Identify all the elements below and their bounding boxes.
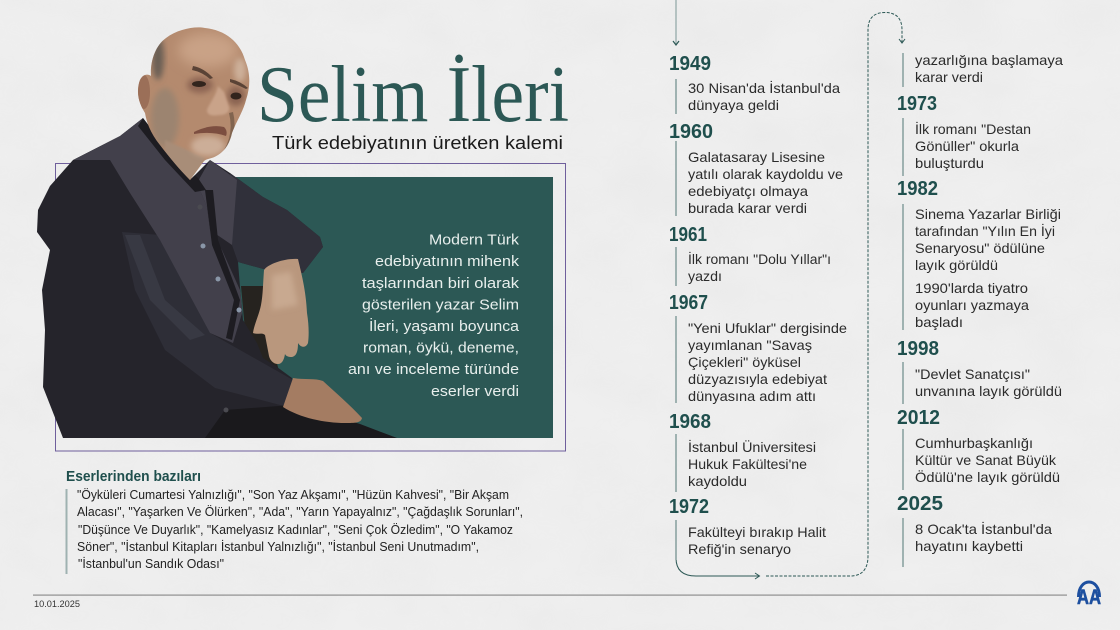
works list: "İstanbul'un Sandık Odası" bbox=[78, 556, 224, 571]
timeline 1968: kaydoldu bbox=[688, 473, 747, 489]
head bbox=[138, 27, 250, 180]
mouth bbox=[194, 126, 227, 136]
timeline 1982: layık görüldü bbox=[915, 257, 998, 273]
arrow: timeline start bbox=[673, 0, 679, 45]
timeline 1968: Hukuk Fakültesi'ne bbox=[688, 456, 807, 472]
timeline 1967: yayımlanan "Savaş bbox=[688, 337, 812, 353]
timeline 1998: "Devlet Sanatçısı" bbox=[915, 366, 1030, 382]
timeline 1960: 1960 bbox=[669, 121, 713, 143]
timeline 1967: Çiçekleri" öyküsel bbox=[688, 354, 801, 370]
panel intro text: İleri, yaşamı boyunca bbox=[369, 317, 520, 335]
timeline 2025 bbox=[897, 493, 1052, 567]
timeline 1968: 1968 bbox=[669, 411, 711, 433]
timeline 1949: dünyaya geldi bbox=[688, 97, 779, 113]
nose bbox=[207, 86, 229, 115]
panel frame bbox=[56, 164, 566, 451]
panel intro text: eserler verdi bbox=[431, 383, 519, 400]
brows bbox=[192, 66, 213, 79]
timeline 2012: 2012 bbox=[897, 407, 940, 429]
teal text panel bbox=[236, 177, 553, 438]
vest right bbox=[197, 160, 237, 245]
icon: AA logo bbox=[1077, 582, 1101, 609]
icon: AA logo: AA bbox=[1077, 586, 1101, 609]
raised hand bbox=[253, 259, 309, 364]
timeline 1982: 1990'larda tiyatro bbox=[915, 280, 1028, 296]
stubble shade bbox=[151, 88, 179, 148]
panel intro text: Modern Türk bbox=[429, 232, 520, 248]
left sleeve bbox=[122, 232, 293, 406]
timeline 1967: "Yeni Ufuklar" dergisinde bbox=[688, 320, 847, 336]
title: Selim İleri bbox=[257, 51, 569, 139]
timeline 1973: İlk romanı "Destan bbox=[915, 120, 1031, 137]
timeline 1949: 30 Nisan'da İstanbul'da bbox=[688, 79, 840, 96]
timeline 1968: İstanbul Üniversitesi bbox=[688, 438, 816, 455]
timeline 1973: buluşturdu bbox=[915, 155, 984, 171]
timeline 1982: oyunları yazmaya bbox=[915, 297, 1029, 313]
timeline 1998: unvanına layık görüldü bbox=[915, 383, 1062, 399]
timeline 2025: 8 Ocak'ta İstanbul'da bbox=[915, 520, 1052, 537]
timeline 1960: burada karar verdi bbox=[688, 200, 807, 216]
timeline 1961: İlk romanı "Dolu Yıllar"ı bbox=[688, 250, 831, 267]
works list bbox=[77, 487, 523, 571]
timeline 1972: 1972 bbox=[669, 496, 709, 518]
timeline 2025: hayatını kaybetti bbox=[915, 538, 1023, 554]
sleeve highlight bbox=[125, 235, 205, 340]
panel intro text: taşlarından biri olarak bbox=[362, 275, 520, 292]
works list: Söner", "İstanbul Kitapları İstanbul Yalnızlığı", "İstanbul Seni Unutmadım", bbox=[77, 539, 479, 554]
timeline 1961: 1961 bbox=[669, 224, 707, 246]
works list: "Düşünce Ve Duyarlık", "Kamelyasız Kadınlar", "Seni Çok Özledim", "O Yakamoz bbox=[78, 522, 513, 537]
timeline 1967 bbox=[669, 292, 847, 404]
timeline 1973: 1973 bbox=[897, 93, 937, 115]
works heading: Eserlerinden bazıları bbox=[66, 469, 201, 485]
timeline 1949 bbox=[669, 53, 840, 114]
timeline 1982: başladı bbox=[915, 314, 963, 330]
timeline 1972 continued: yazarlığına başlamaya bbox=[915, 52, 1063, 68]
hair side bbox=[152, 36, 164, 80]
timeline 1973: Gönüller" okurla bbox=[915, 138, 1019, 154]
timeline 1961: yazdı bbox=[688, 268, 722, 284]
button placket bbox=[205, 190, 240, 340]
timeline 1949: 1949 bbox=[669, 53, 711, 75]
portrait of Selim İleri bbox=[30, 20, 410, 440]
neck bbox=[164, 142, 203, 180]
timeline 1972 continued bbox=[902, 52, 1063, 87]
hand highlight bbox=[272, 272, 298, 310]
subtitle: Türk edebiyatının üretken kalemi bbox=[272, 133, 563, 153]
arrow: dashed connector to next column bbox=[766, 12, 905, 576]
chin and cheek light bbox=[191, 136, 225, 156]
timeline 1960: Galatasaray Lisesine bbox=[688, 149, 825, 165]
works section bbox=[66, 469, 523, 574]
button details bbox=[198, 204, 242, 412]
timeline 1967: dünyasına adım attı bbox=[688, 388, 816, 404]
timeline 1982: Sinema Yazarlar Birliği bbox=[915, 206, 1061, 222]
forehead light bbox=[178, 33, 238, 67]
panel intro text bbox=[348, 232, 520, 400]
cheek fold bbox=[224, 112, 235, 150]
timeline 2012: Ödülü'ne layık görüldü bbox=[915, 468, 1060, 485]
timeline 1972 bbox=[669, 496, 826, 560]
timeline 1982: 1982 bbox=[897, 178, 938, 200]
timeline 2012: Cumhurbaşkanlığı bbox=[915, 435, 1033, 451]
arrow: solid curve to next column bbox=[676, 558, 760, 579]
trousers bbox=[205, 405, 397, 438]
right sleeve bbox=[230, 173, 323, 273]
jacket and shading bbox=[30, 110, 410, 440]
eye sockets bbox=[187, 77, 213, 93]
date: 10.01.2025 bbox=[34, 599, 80, 610]
timeline 1972: Fakülteyi bırakıp Halit bbox=[688, 524, 826, 540]
timeline 1960 bbox=[669, 121, 843, 216]
panel intro text: roman, öykü, deneme, bbox=[363, 340, 519, 356]
ear bbox=[138, 75, 150, 109]
vest left bbox=[73, 118, 243, 343]
panel intro text: anı ve inceleme türünde bbox=[348, 361, 519, 378]
eyes bbox=[192, 81, 206, 87]
timeline 2025: 2025 bbox=[897, 493, 943, 515]
timeline 2012: Kültür ve Sanat Büyük bbox=[915, 452, 1057, 468]
works list: "Öyküleri Cumartesi Yalnızlığı", "Son Yaz Akşamı", "Hüzün Kahvesi", "Bir Akşam bbox=[77, 487, 509, 502]
timeline 1967: düzyazısıyla edebiyat bbox=[688, 371, 827, 387]
resting hand bbox=[283, 378, 362, 423]
chair back bbox=[241, 286, 282, 382]
timeline 1973 bbox=[897, 93, 1031, 176]
panel intro text: gösterilen yazar Selim bbox=[362, 296, 519, 314]
timeline 1968 bbox=[669, 411, 816, 492]
timeline 1998: 1998 bbox=[897, 338, 939, 360]
timeline 1982: tarafından "Yılın En İyi bbox=[915, 222, 1055, 239]
timeline 1961 bbox=[669, 224, 831, 286]
timeline 1998 bbox=[897, 338, 1062, 404]
collar bbox=[138, 118, 206, 192]
footer rule bbox=[33, 594, 1067, 596]
timeline 1972: Refiğ'in senaryo bbox=[688, 541, 791, 557]
works bar bbox=[66, 489, 68, 574]
timeline 1967: 1967 bbox=[669, 292, 708, 314]
timeline 1972 continued: karar verdi bbox=[915, 69, 983, 85]
panel intro text: edebiyatının mihenk bbox=[375, 253, 520, 270]
timeline 1960: yatılı olarak kaydoldu ve bbox=[688, 166, 843, 182]
timeline 1982 bbox=[897, 178, 1061, 330]
timeline 1982: Senaryosu" ödülüne bbox=[915, 240, 1045, 256]
timeline 1960: edebiyatçı olmaya bbox=[688, 183, 808, 199]
timeline 2012 bbox=[897, 407, 1060, 490]
works list: Alacası", "Yaşarken Ve Ölürken", "Ada", "Yarın Yapayalnız", "Çağdaşlık Sorunları", bbox=[77, 504, 523, 519]
